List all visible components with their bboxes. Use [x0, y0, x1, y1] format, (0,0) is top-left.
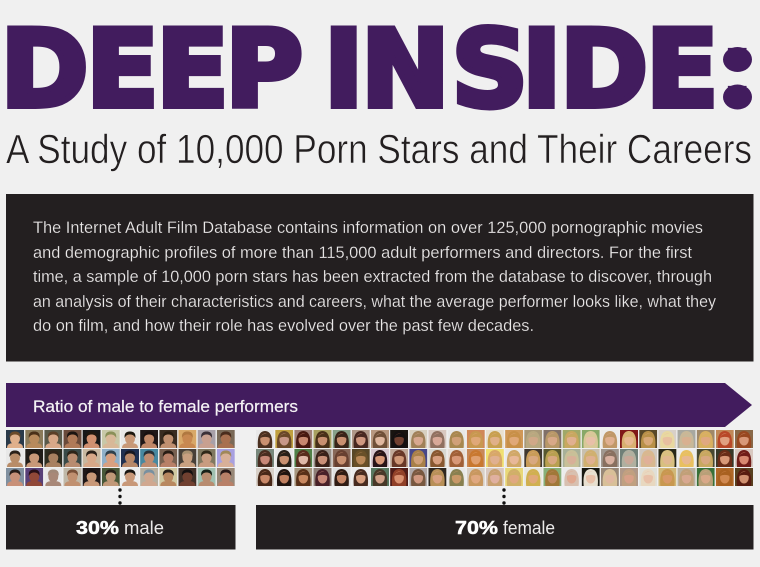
title: INSIDE — [324, 8, 718, 131]
introduction text: The Internet Adult Film Database contains information on over 125,000 pornographic movies — [33, 219, 703, 237]
section heading arrow: ratio of male to female performers: Ratio of male to female performers — [33, 398, 298, 416]
male performer portraits — [6, 430, 235, 486]
section heading arrow: ratio of male to female performers — [6, 383, 752, 427]
stat box: 30% male — [6, 505, 236, 550]
introduction text: do on film, and how their role has evolved over the past few decades. — [33, 317, 534, 335]
panel: introduction — [6, 194, 754, 362]
stat box: 70% female: 70% — [455, 517, 498, 538]
introduction text — [33, 219, 717, 335]
stat box: 70% female — [256, 505, 754, 550]
introduction text: and demographic profiles of more than 115,000 adult performers and directors. For the first — [33, 244, 692, 262]
female performer portraits — [256, 430, 753, 486]
title — [0, 8, 758, 131]
dotted connector: male — [118, 488, 122, 505]
stat box: 30% male: 30% — [76, 517, 119, 538]
introduction text: an analysis of their characteristics and careers, what the average performer looks like, what they — [33, 293, 717, 311]
title: DEEP — [0, 8, 303, 131]
dotted connector: female — [502, 488, 506, 505]
introduction text: time, a sample of 10,000 porn stars has been extracted from the database to discover, through — [33, 268, 712, 286]
title: : — [716, 8, 758, 131]
stat box: 30% male: male — [124, 517, 164, 538]
stat box: 70% female: female — [503, 517, 555, 538]
